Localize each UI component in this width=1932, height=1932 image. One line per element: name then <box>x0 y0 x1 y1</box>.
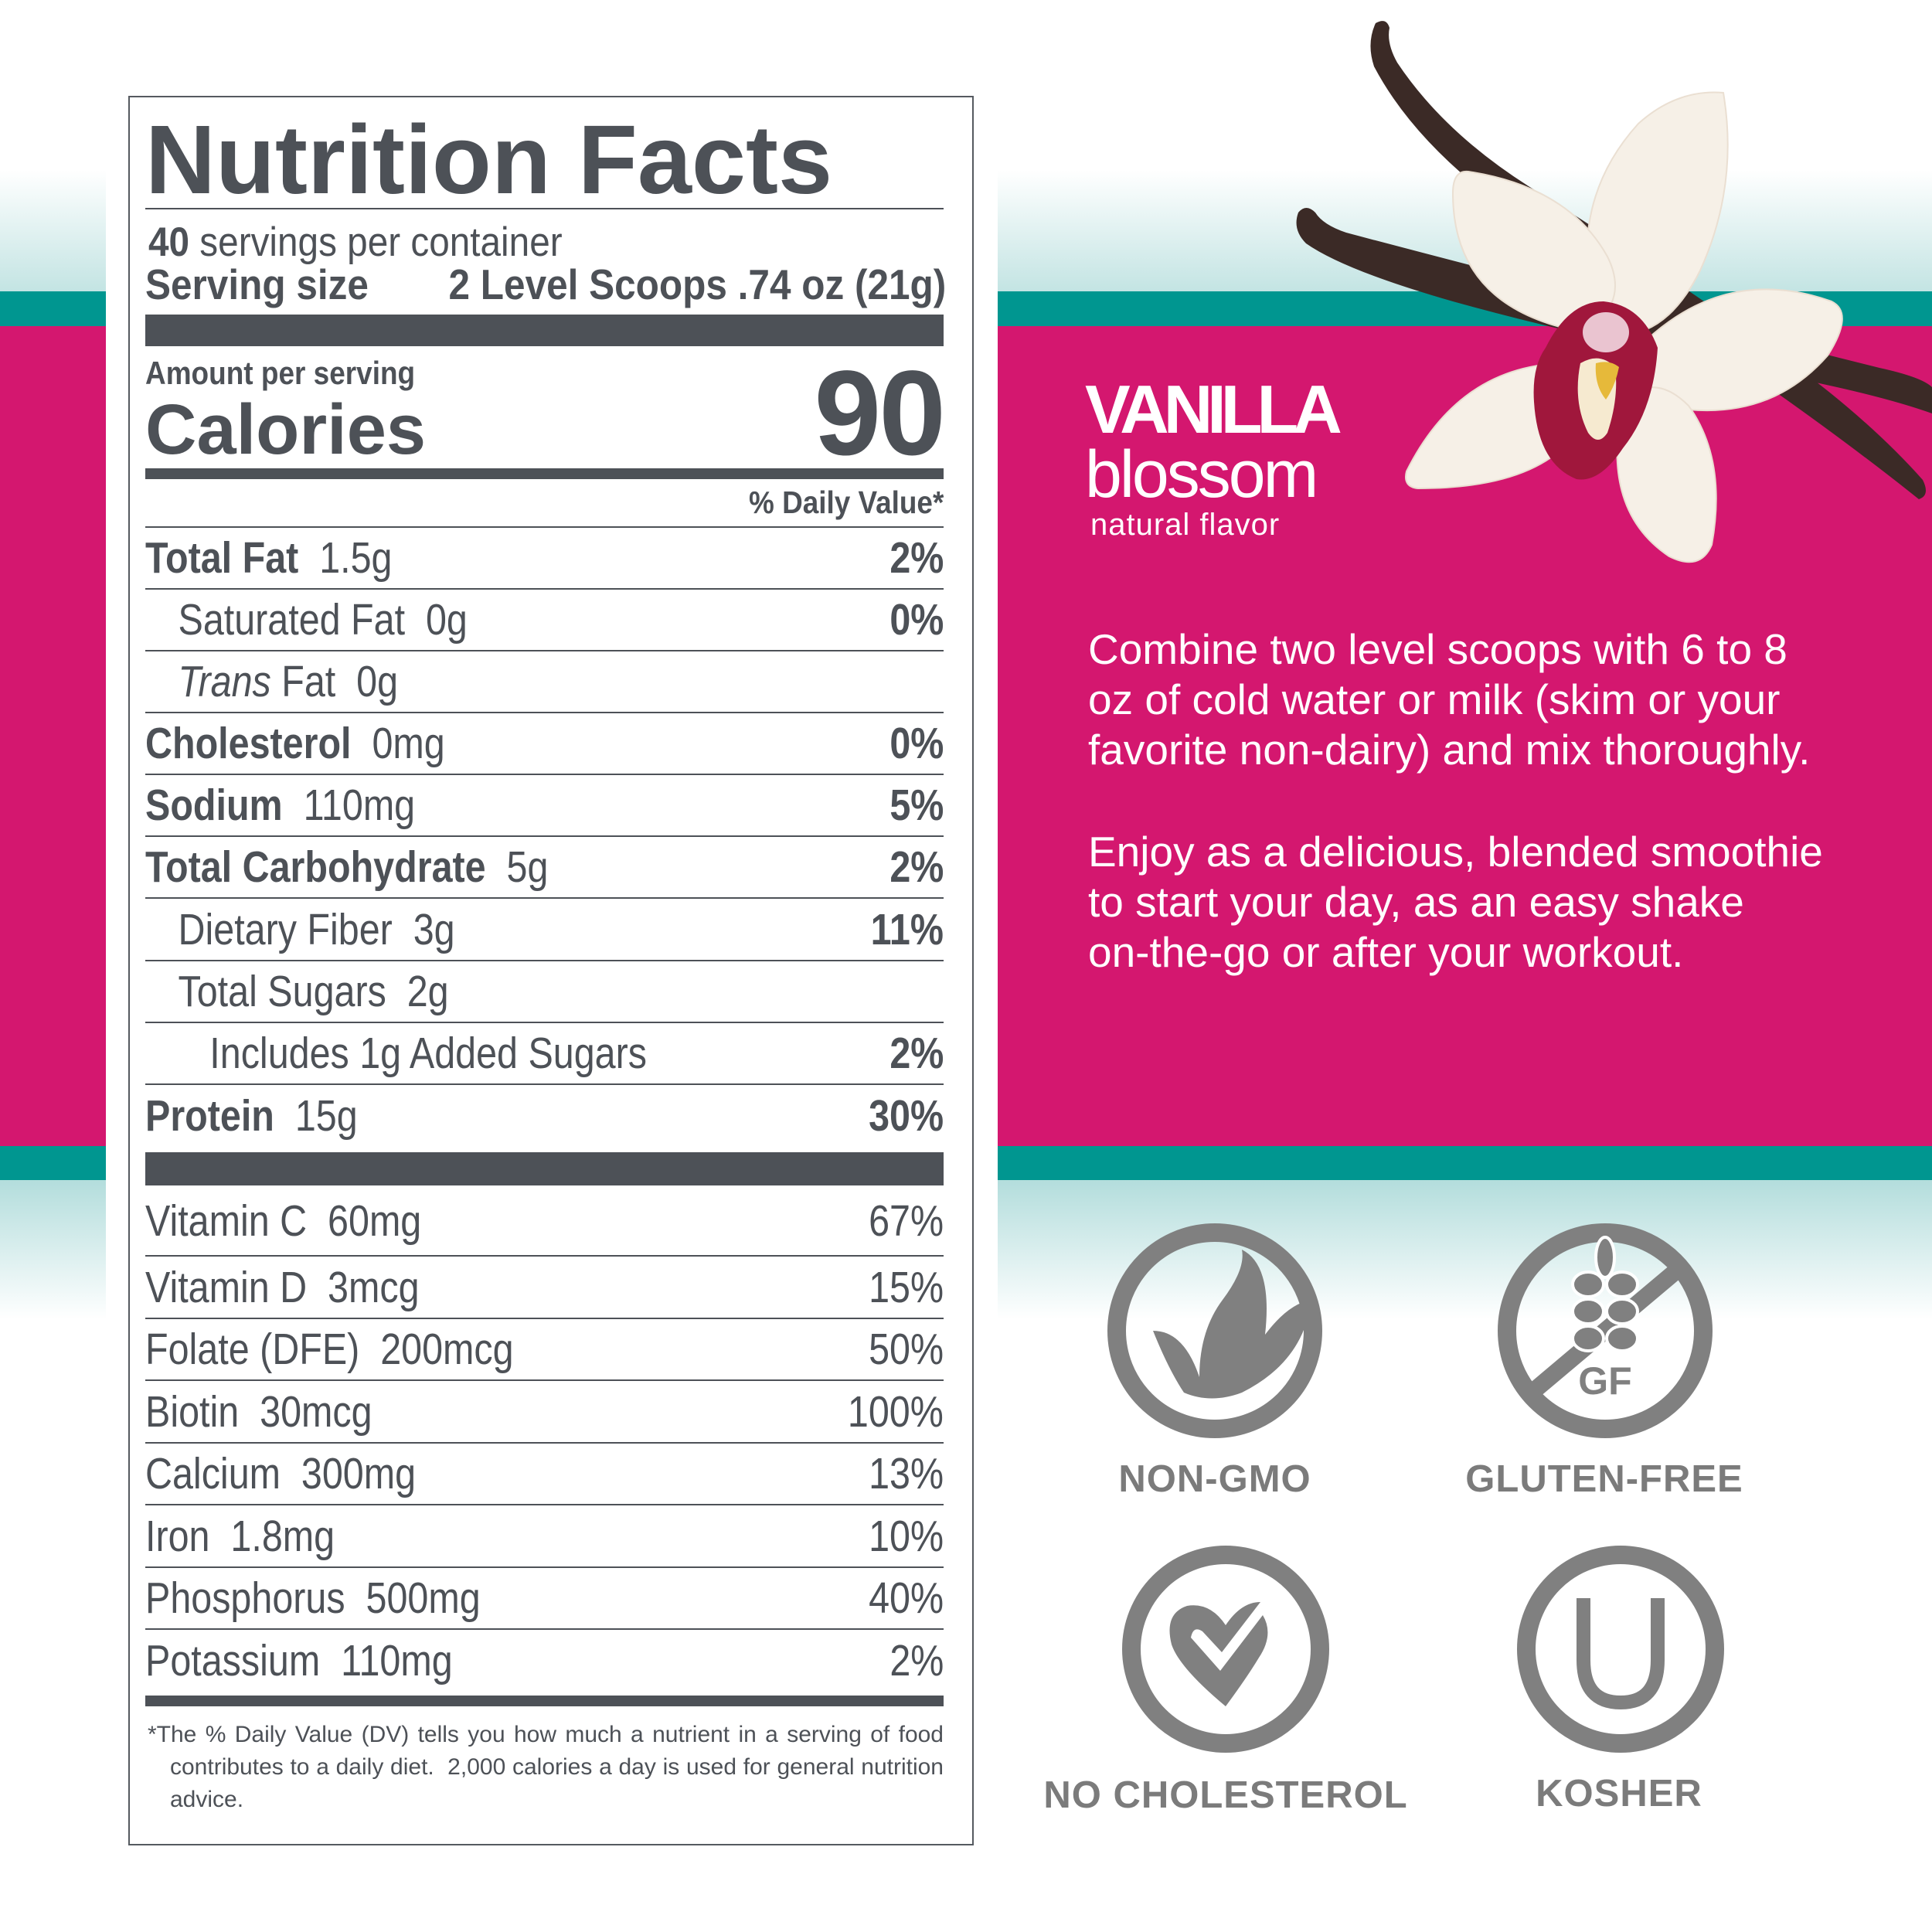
nutrient rows: Sodium 110mg <box>145 781 415 830</box>
serving size: 2 Level Scoops .74 oz (21g) <box>449 260 946 308</box>
illustration: vanilla flower and pods <box>1297 21 1932 563</box>
vitamin rows: Iron 1.8mg <box>145 1512 335 1561</box>
text: enjoy: Enjoy as a delicious, blended smoothie <box>1088 828 1823 876</box>
label: non-gmo: NON-GMO <box>1118 1458 1311 1500</box>
nutrient rows: 11% <box>871 904 944 954</box>
nutrient rows: 0% <box>889 719 944 768</box>
text: enjoy: on-the-go or after your workout. <box>1088 928 1683 976</box>
icon: gluten-free: GF <box>1578 1359 1632 1403</box>
calories: 90 <box>814 346 944 481</box>
nutrient rows: Includes 1g Added Sugars <box>209 1028 647 1077</box>
nutrient rows: 5% <box>889 781 944 830</box>
vitamin rows: 100% <box>848 1386 944 1436</box>
nutrient rows: 2% <box>889 1028 944 1077</box>
icon: gluten-free <box>1498 1223 1713 1438</box>
serving size: Serving size <box>145 260 369 308</box>
icon: kosher <box>1517 1546 1724 1753</box>
nutrient rows: Protein 15g <box>145 1091 358 1141</box>
vitamin rows: Biotin 30mcg <box>145 1386 372 1436</box>
label: gluten-free: GLUTEN-FREE <box>1465 1458 1743 1500</box>
text: mixing instructions: favorite non-dairy) and mix thoroughly. <box>1088 726 1810 774</box>
nutrient rows: Total Carbohydrate 5g <box>145 842 548 892</box>
label: kosher: KOSHER <box>1536 1773 1702 1815</box>
icon: non-gmo <box>1107 1223 1322 1438</box>
vitamin rows: 2% <box>889 1635 944 1685</box>
nutrient rows <box>145 533 944 1141</box>
calories: Calories <box>145 390 426 469</box>
footnote <box>148 1722 944 1812</box>
vitamin rows: Phosphorus 500mg <box>145 1573 481 1623</box>
vitamin rows: 15% <box>869 1263 944 1312</box>
text: enjoy: to start your day, as an easy shake <box>1088 878 1744 926</box>
heading: vanilla blossom <box>1085 371 1340 542</box>
panel: nutrition facts <box>128 96 974 1845</box>
footnote: *The % Daily Value (DV) tells you how much a nutrient in a serving of food <box>148 1722 944 1747</box>
calories: Amount per serving <box>145 355 415 391</box>
footnote: advice. <box>170 1787 243 1812</box>
vitamin rows: Vitamin D 3mcg <box>145 1263 420 1312</box>
nutrient rows: Trans Fat 0g <box>178 657 398 706</box>
title: Nutrition Facts <box>145 105 832 214</box>
daily value header: % Daily Value* <box>749 485 944 520</box>
nutrient rows: 2% <box>889 533 944 583</box>
label: no cholesterol: NO CHOLESTEROL <box>1043 1774 1408 1816</box>
vitamin rows: 10% <box>869 1512 944 1561</box>
vitamin rows: Calcium 300mg <box>145 1448 416 1498</box>
calories <box>145 346 944 481</box>
icon: no cholesterol <box>1122 1546 1329 1753</box>
footnote: contributes to a daily diet. 2,000 calories a day is used for general nutrition <box>170 1754 944 1780</box>
vitamin rows: 50% <box>869 1325 944 1374</box>
vitamin rows: 67% <box>869 1196 944 1246</box>
nutrient rows: Saturated Fat 0g <box>178 595 468 645</box>
nutrient rows: Cholesterol 0mg <box>145 719 445 768</box>
heading: vanilla blossom: VANILLA <box>1085 371 1337 447</box>
text: mixing instructions <box>1088 625 1810 774</box>
nutrient rows: 30% <box>869 1091 944 1141</box>
heading: vanilla blossom: blossom <box>1085 437 1316 512</box>
text: mixing instructions: Combine two level scoops with 6 to 8 <box>1088 625 1787 673</box>
vitamin rows: Potassium 110mg <box>145 1635 453 1685</box>
nutrient rows: 0% <box>889 595 944 645</box>
text: mixing instructions: oz of cold water or milk (skim or your <box>1088 675 1781 723</box>
nutrient rows: Dietary Fiber 3g <box>178 904 455 954</box>
vitamin rows <box>145 1196 944 1685</box>
nutrient rows: Total Fat 1.5g <box>145 533 393 583</box>
nutrient rows: Total Sugars 2g <box>178 966 449 1015</box>
heading: vanilla blossom: natural flavor <box>1090 508 1280 542</box>
vitamin rows: 13% <box>869 1448 944 1498</box>
vitamin rows: 40% <box>869 1573 944 1623</box>
serving size <box>145 260 946 308</box>
text: enjoy <box>1088 828 1823 976</box>
servings: 40 servings per container <box>148 219 563 265</box>
vitamin rows: Folate (DFE) 200mcg <box>145 1325 514 1374</box>
vitamin rows: Vitamin C 60mg <box>145 1196 421 1246</box>
nutrient rows: 2% <box>889 842 944 892</box>
